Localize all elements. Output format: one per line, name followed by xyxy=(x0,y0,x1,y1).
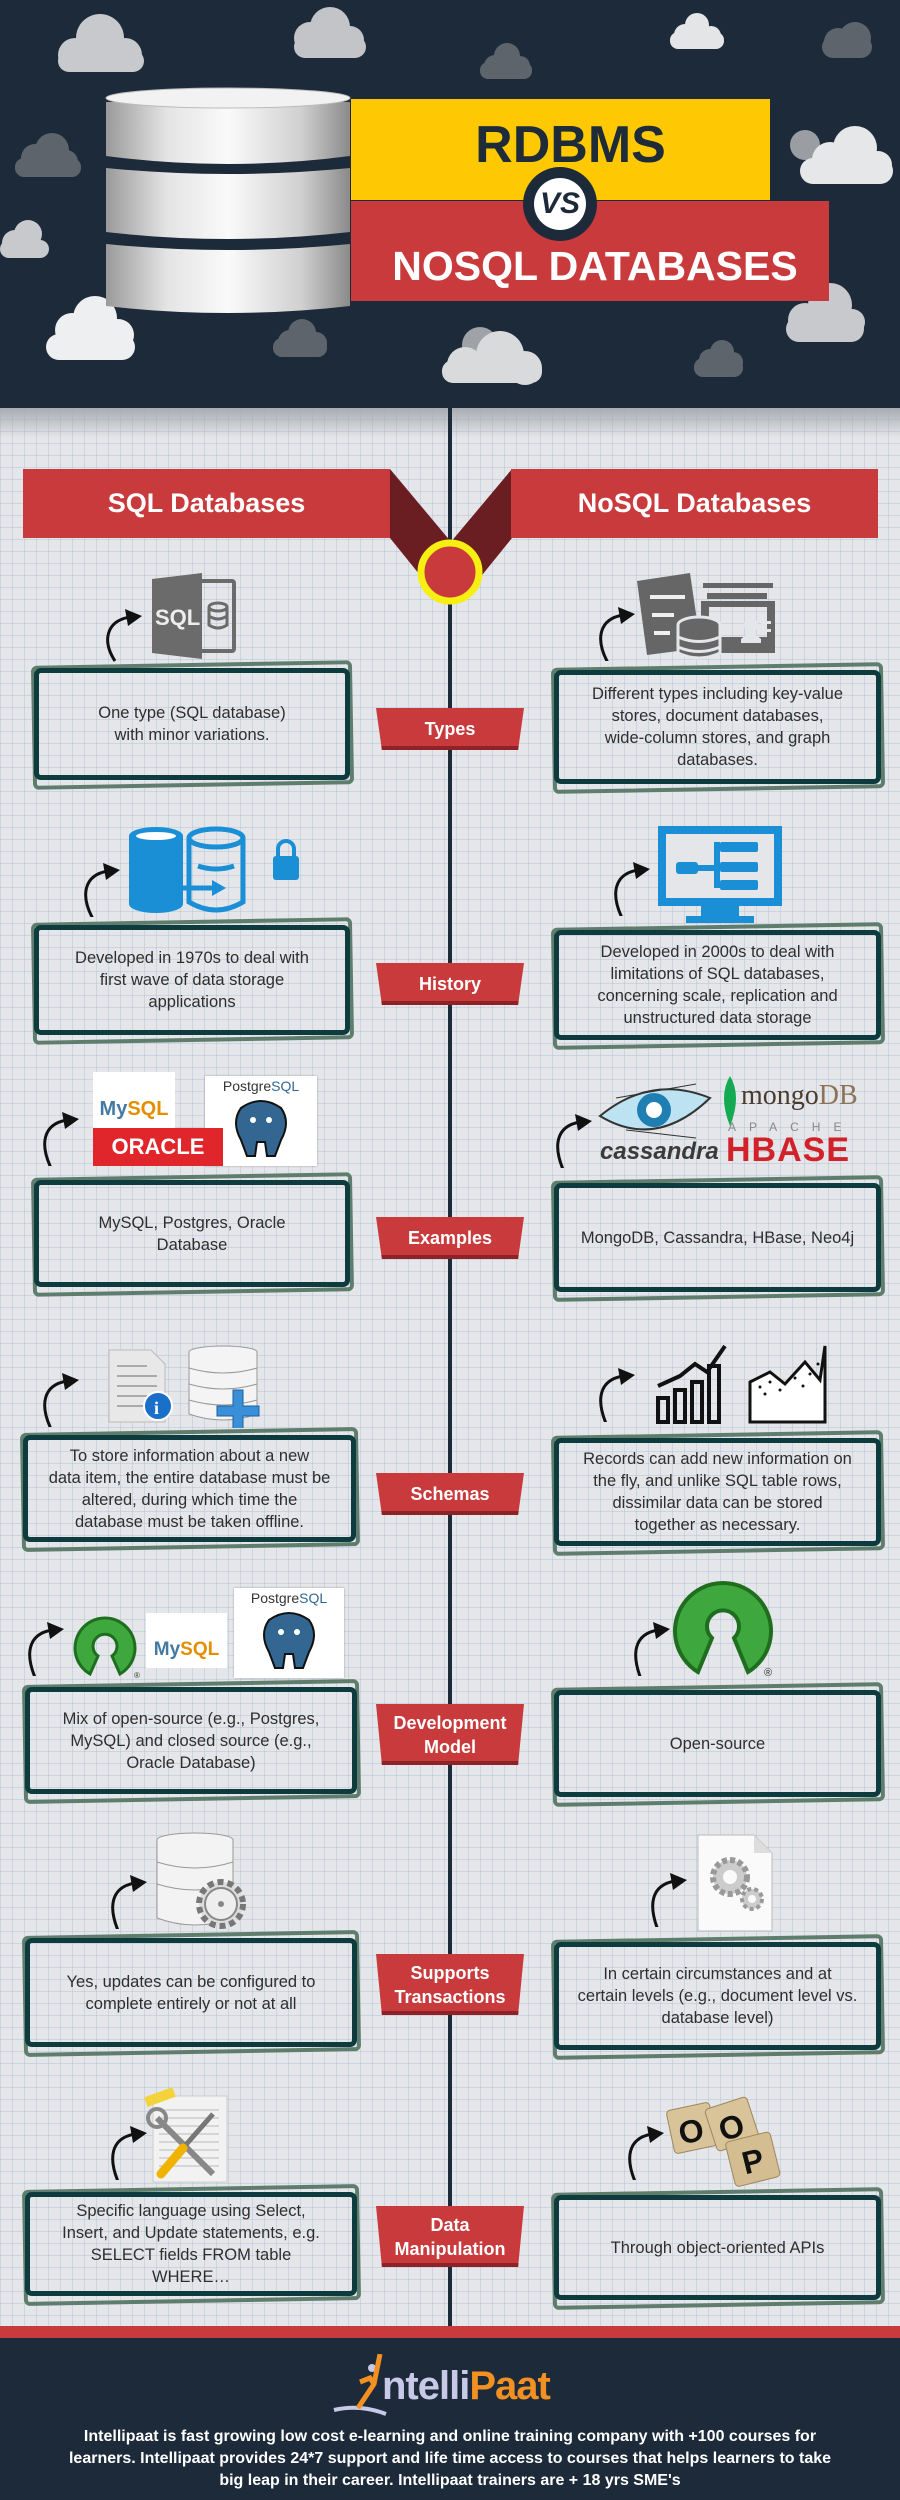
icon: MySQL Oracle PostgreSQL logos: MySQL xyxy=(100,1098,168,1120)
arrow xyxy=(599,1368,635,1422)
icon: document info and db plus xyxy=(108,1346,260,1428)
box: History left: first wave of data storage xyxy=(100,971,284,989)
box: Development left: Oracle Database) xyxy=(126,1754,256,1772)
box: Data Manipulation right xyxy=(554,2195,881,2300)
database cylinder xyxy=(106,88,350,313)
box: Development left: MySQL) and closed source (e.g., xyxy=(70,1732,312,1750)
icon: open source, MySQL, PostgreSQL: ® xyxy=(134,1671,140,1680)
icon: OOP scrabble tiles: P xyxy=(738,2141,768,2181)
footer text xyxy=(0,2426,900,2492)
box: Data Manipulation left: Specific language using Select, xyxy=(76,2202,306,2220)
box: Data Manipulation left: SELECT fields FROM table xyxy=(91,2246,291,2264)
box: Examples right xyxy=(551,1175,885,1302)
vs badge xyxy=(523,167,597,241)
icon: open source, MySQL, PostgreSQL: MySQL xyxy=(154,1639,219,1660)
box: Transactions left: Yes, updates can be configured to xyxy=(67,1972,315,1990)
box: Types right xyxy=(551,662,885,794)
box: History right: limitations of SQL databases, xyxy=(610,965,824,983)
box: Transactions right: In certain circumstances and at xyxy=(603,1965,832,1983)
divider line xyxy=(448,408,452,2328)
box: History left: applications xyxy=(148,993,236,1011)
box: Examples left xyxy=(31,1172,354,1297)
label: Data Manipulation xyxy=(376,2206,524,2267)
box: History left: Developed in 1970s to deal with xyxy=(75,949,309,967)
footer red stripe xyxy=(0,2326,900,2338)
box: Transactions left: complete entirely or not at all xyxy=(86,1994,296,2012)
label: Data Manipulation: Manipulation xyxy=(394,2238,506,2258)
label: Schemas: Schemas xyxy=(410,1484,490,1504)
box: Data Manipulation left xyxy=(25,2192,357,2296)
ribbon xyxy=(390,469,512,604)
arrow xyxy=(43,1112,79,1166)
box: Schemas right: Records can add new information on xyxy=(583,1450,852,1468)
label: Schemas xyxy=(376,1473,524,1515)
label: History xyxy=(376,963,524,1005)
title: RDBMS: RDBMS xyxy=(475,116,666,174)
box: Types right: databases. xyxy=(677,751,758,769)
icon: SQL document: SQL xyxy=(155,605,200,630)
box: Transactions right: certain levels (e.g., document level vs. xyxy=(578,1987,857,2005)
title: NOSQL DATABASES xyxy=(351,201,829,301)
box: Types right: stores, document databases, xyxy=(612,707,823,725)
box: Development left: Mix of open-source (e.g., Postgres, xyxy=(63,1710,319,1728)
label: Examples: Examples xyxy=(408,1228,492,1248)
title: NOSQL DATABASES: NOSQL DATABASES xyxy=(392,242,798,288)
arrow xyxy=(651,1873,687,1927)
box: Schemas right: dissimilar data can be stored xyxy=(612,1494,823,1512)
box: Schemas right: the fly, and unlike SQL table rows, xyxy=(593,1472,842,1490)
box: Transactions right: database level) xyxy=(662,2009,773,2027)
label: Types: Types xyxy=(425,719,475,739)
box: Types right: Different types including key-value xyxy=(592,685,843,703)
box: Examples right: MongoDB, Cassandra, HBase, Neo4j xyxy=(581,1228,854,1246)
label: Development Model xyxy=(376,1704,524,1765)
box: History right: Developed in 2000s to deal with xyxy=(601,943,834,961)
arrow xyxy=(105,2124,155,2180)
footer xyxy=(0,2326,900,2500)
box: Development left xyxy=(22,1679,361,1804)
box: Schemas left xyxy=(20,1427,360,1552)
footer text: big leap in their career. Intellipaat trainers are + 18 yrs SME's xyxy=(219,2472,681,2489)
box: Transactions right xyxy=(551,1934,885,2060)
icon: open source logo xyxy=(673,1581,773,1679)
icon: SQL document xyxy=(152,573,236,659)
icon: database with gear xyxy=(156,1832,246,1929)
icon: cassandra mongoDB hbase logos: APACHE xyxy=(728,1120,854,1134)
icon: OOP scrabble tiles: O xyxy=(675,2111,707,2151)
arrow xyxy=(634,1622,670,1676)
label: Supports Transactions: Transactions xyxy=(394,1986,506,2006)
icon: cassandra mongoDB hbase logos xyxy=(598,1076,858,1169)
banner: SQL Databases: SQL Databases xyxy=(108,488,305,518)
icon: blue databases with lock xyxy=(129,826,299,913)
icon: MySQL Oracle PostgreSQL logos: ORACLE xyxy=(112,1134,204,1159)
icon: open source, MySQL, PostgreSQL: PostgreSQL xyxy=(251,1590,327,1606)
arrow xyxy=(28,1622,64,1676)
box: Schemas left: altered, during which time the xyxy=(82,1490,297,1508)
icon: open source logo: ® xyxy=(764,1667,772,1679)
icon: MySQL Oracle PostgreSQL logos xyxy=(93,1072,318,1168)
banner: NoSQL Databases: NoSQL Databases xyxy=(578,488,811,518)
box: Data Manipulation left: Insert, and Update statements, e.g. xyxy=(62,2224,320,2242)
icon: OOP scrabble tiles xyxy=(664,2090,804,2188)
box: Schemas right xyxy=(551,1430,885,1556)
banner: SQL Databases xyxy=(23,469,390,538)
label: Development Model: Model xyxy=(424,1736,476,1756)
icon: cassandra mongoDB hbase logos: HBASE xyxy=(726,1131,850,1169)
box: Development right xyxy=(551,1682,885,1807)
box: Examples left: MySQL, Postgres, Oracle xyxy=(98,1214,286,1232)
box: Types left: with minor variations. xyxy=(114,726,269,744)
icon: blue monitor xyxy=(658,826,782,923)
box: Types left xyxy=(31,660,354,790)
arrow xyxy=(43,1373,79,1427)
arrow xyxy=(622,2124,672,2180)
box: Examples left: Database xyxy=(157,1236,227,1254)
icon: document with gears xyxy=(698,1834,772,1932)
box: Schemas right: together as necessary. xyxy=(635,1516,800,1534)
arrow xyxy=(84,863,120,917)
clouds xyxy=(0,7,893,385)
icon: document info and db plus: i xyxy=(154,1398,159,1418)
icon: document database and card xyxy=(637,573,775,660)
logo: Intellipaat: ntelliPaat xyxy=(382,2364,550,2408)
box: History right: concerning scale, replication and xyxy=(597,987,838,1005)
box: Schemas left: database must be taken offline. xyxy=(75,1512,304,1530)
header background xyxy=(0,0,900,408)
box: History right: unstructured data storage xyxy=(623,1009,812,1027)
icon: cassandra mongoDB hbase logos: mongoDB xyxy=(741,1080,858,1111)
box: Types right: wide-column stores, and graph xyxy=(605,729,830,747)
banner: NoSQL Databases xyxy=(511,469,878,538)
icon: OOP scrabble tiles: O xyxy=(714,2106,749,2148)
box: Schemas left: To store information about a new xyxy=(70,1446,309,1464)
title xyxy=(351,99,829,301)
arrow xyxy=(111,1875,147,1929)
arrow xyxy=(599,607,635,661)
icon: bar chart and area chart xyxy=(656,1344,826,1424)
box: Transactions left xyxy=(22,1930,361,2057)
vs badge: VS xyxy=(540,187,580,220)
box: Types left: One type (SQL database) xyxy=(98,704,286,722)
arrow xyxy=(614,862,650,916)
label: Supports Transactions xyxy=(376,1954,524,2015)
footer text: Intellipaat is fast growing low cost e-learning and online training company with +100 courses for xyxy=(84,2428,816,2445)
arrow xyxy=(106,609,142,662)
arrow xyxy=(556,1114,592,1168)
box: History left xyxy=(31,917,354,1045)
label: Development Model: Development xyxy=(393,1712,507,1732)
label: Data Manipulation: Data xyxy=(430,2214,470,2234)
icon: open source, MySQL, PostgreSQL xyxy=(74,1586,346,1680)
icon: MySQL Oracle PostgreSQL logos: PostgreSQL xyxy=(223,1078,299,1094)
label: Examples xyxy=(376,1217,524,1259)
label: History: History xyxy=(419,974,481,994)
label: Types xyxy=(376,708,524,750)
icon: cassandra mongoDB hbase logos: cassandra xyxy=(600,1138,719,1165)
box: Data Manipulation left: WHERE… xyxy=(152,2268,230,2286)
logo: Intellipaat xyxy=(330,2354,570,2424)
box: History right xyxy=(551,922,885,1050)
box: Data Manipulation right: Through object-oriented APIs xyxy=(611,2238,824,2256)
box: Schemas left: data item, the entire database must be xyxy=(49,1468,330,1486)
icon: coding tools xyxy=(143,2088,231,2184)
box: Development right: Open-source xyxy=(670,1734,765,1752)
title: RDBMS xyxy=(351,99,770,200)
label: Supports Transactions: Supports xyxy=(410,1962,489,1982)
footer text: learners. Intellipaat provides 24*7 support and life time access to courses that helps learners to take xyxy=(69,2450,831,2467)
